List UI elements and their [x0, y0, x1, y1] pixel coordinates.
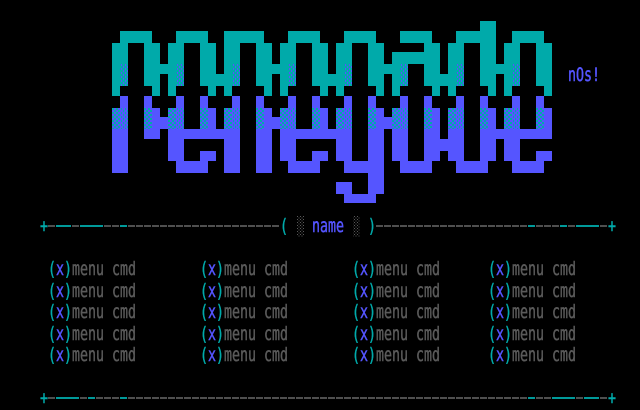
menu column 4: (x)menu cmd	[488, 301, 576, 323]
menu column 4: (x)menu cmd	[488, 323, 576, 345]
bottom divider	[40, 387, 616, 409]
menu column 2: (x)menu cmd	[200, 344, 288, 366]
menu column 2	[200, 258, 288, 366]
top divider with name heading	[40, 215, 616, 237]
menu column 2: (x)menu cmd	[200, 323, 288, 345]
menu column 3	[352, 258, 440, 366]
menu column 2: (x)menu cmd	[200, 280, 288, 302]
logo upper half: teal letters	[112, 21, 552, 96]
bottom divider: +	[608, 387, 616, 409]
top divider with name heading: )	[368, 215, 376, 237]
heading: name: name	[312, 215, 344, 237]
menu column 1: (x)menu cmd	[48, 301, 136, 323]
top divider with name heading: +	[40, 215, 48, 237]
top divider with name heading: +	[608, 215, 616, 237]
menu column 3: (x)menu cmd	[352, 344, 440, 366]
menu column 3: (x)menu cmd	[352, 301, 440, 323]
logo lower half: blue letters	[112, 96, 552, 203]
logo: dither inside teal stems	[120, 64, 520, 86]
menu column 4	[488, 258, 576, 366]
menu column 1: (x)menu cmd	[48, 344, 136, 366]
menu column 2: (x)menu cmd	[200, 301, 288, 323]
menu column 1: (x)menu cmd	[48, 323, 136, 345]
logo: dense dither band	[112, 108, 544, 129]
logo: ascii art wordmark	[112, 21, 552, 203]
menu column 3: (x)menu cmd	[352, 280, 440, 302]
menu column 1	[48, 258, 136, 366]
tag: nOs!: nOs!	[568, 64, 600, 86]
bottom divider: +	[40, 387, 48, 409]
menu column 4: (x)menu cmd	[488, 258, 576, 280]
top divider with name heading: (	[280, 215, 288, 237]
menu column 4: (x)menu cmd	[488, 280, 576, 302]
menu column 4: (x)menu cmd	[488, 344, 576, 366]
menu column 3: (x)menu cmd	[352, 323, 440, 345]
menu column 2: (x)menu cmd	[200, 258, 288, 280]
menu column 1: (x)menu cmd	[48, 280, 136, 302]
menu column 3: (x)menu cmd	[352, 258, 440, 280]
menu column 1: (x)menu cmd	[48, 258, 136, 280]
logo: sparse dither band	[120, 108, 520, 129]
